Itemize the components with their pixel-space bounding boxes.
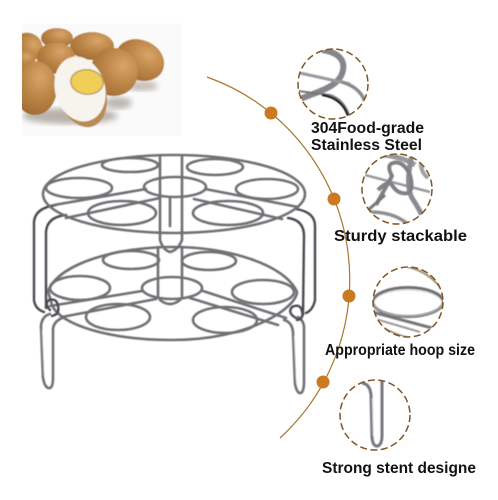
stainless steel egg rack	[34, 155, 315, 393]
timeline dot 4	[316, 376, 330, 388]
caption: 304Food-grade Stainless Steel: 304Food-grade	[311, 120, 424, 137]
lower rack legs	[41, 300, 304, 393]
timeline dot 1	[264, 106, 278, 120]
caption: 304Food-grade Stainless Steel: Stainless Steel	[311, 137, 422, 154]
detail circle: hoop	[372, 267, 444, 338]
caption: Appropriate hoop size: Appropriate hoop size	[325, 342, 475, 359]
timeline dot 2	[328, 192, 340, 206]
detail circle: leg	[340, 380, 410, 450]
caption: Sturdy stackable: Sturdy stackable	[334, 228, 467, 245]
photo: boiled eggs	[22, 27, 166, 128]
detail circle: wire joint	[298, 49, 368, 119]
caption: Strong stent designe: Strong stent designe	[322, 460, 476, 477]
upper rack: outer hoop, supports and spokes	[43, 155, 305, 252]
caption: 304Food-grade Stainless Steel	[311, 120, 424, 154]
upper rack legs	[34, 205, 315, 315]
curved timeline arc	[207, 77, 350, 438]
timeline dot 3	[342, 290, 356, 302]
lower rack: outer hoop and spokes	[48, 247, 297, 340]
detail circle: stacking hook	[362, 154, 432, 226]
